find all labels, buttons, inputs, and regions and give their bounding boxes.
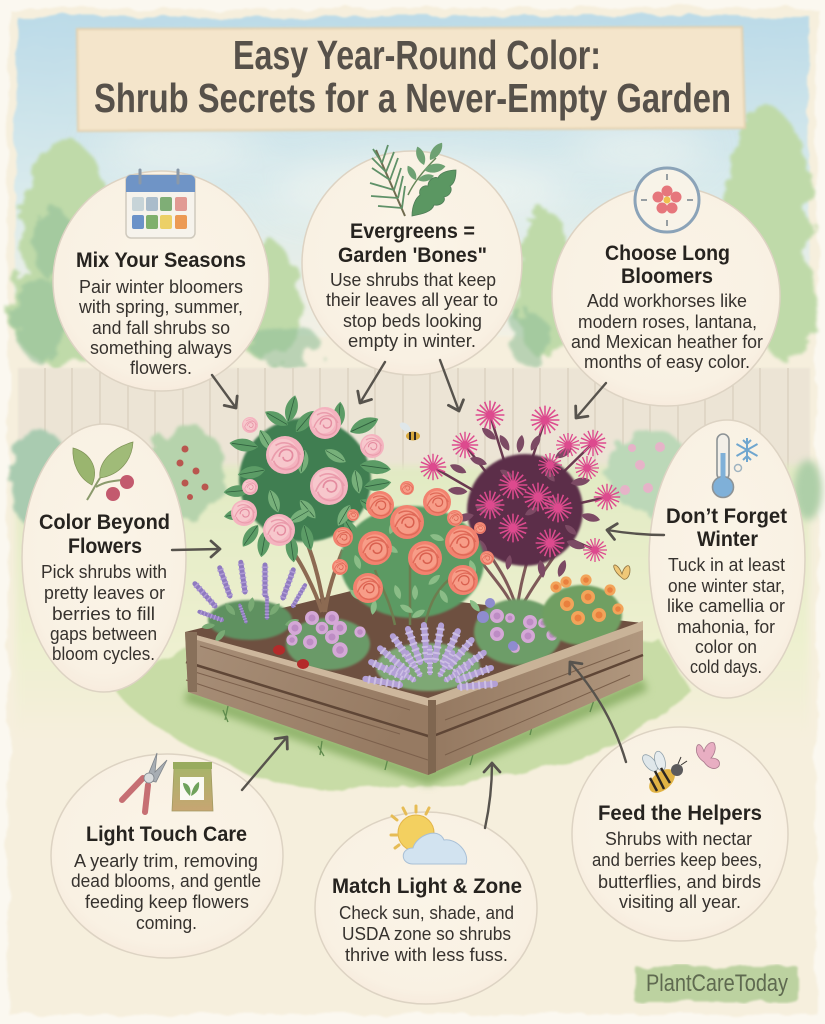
body text: Shrubs with nectar (605, 829, 752, 849)
heading: Color Beyond (39, 511, 170, 534)
body text: thrive with less fuss. (345, 945, 508, 965)
body text: visiting all year. (619, 892, 741, 912)
body text: like camellia or (667, 596, 785, 616)
arrow: match light and zone (484, 763, 500, 828)
body text: cold days. (690, 657, 762, 677)
purple shrub (420, 401, 620, 610)
wooden bed left face (185, 632, 428, 775)
sky highlights (100, 132, 710, 220)
body text (667, 555, 785, 677)
body text: Pick shrubs with (41, 562, 167, 582)
arrow: color beyond flowers (172, 541, 220, 557)
orange lantana (542, 574, 624, 645)
heading: Winter (697, 528, 758, 551)
fence (18, 368, 810, 478)
lavender left (195, 562, 305, 643)
body text: A yearly trim, removing (74, 851, 258, 871)
heading: Garden 'Bones" (338, 244, 487, 267)
body text: dead blooms, and gentle (71, 871, 261, 891)
panel: light touch care: Light Touch Care (86, 823, 247, 846)
body text: empty in winter. (348, 331, 476, 351)
soil and back rim (185, 590, 643, 702)
body text (339, 903, 514, 965)
sky wash (16, 16, 809, 336)
body text (78, 277, 243, 378)
title banner: Easy Year-Round Color: (233, 32, 601, 78)
panel: mix your seasons (53, 170, 269, 391)
body text: with spring, summer, (78, 297, 243, 317)
illustration: raised garden bed (185, 394, 643, 775)
body text: and berries keep bees, (592, 850, 762, 870)
arrow: evergreens right (440, 360, 467, 414)
icon: thermometer and snowflake (712, 434, 758, 498)
arrow: don't forget winter (606, 522, 664, 539)
heading: Don’t Forget (666, 505, 787, 528)
camellia shrub (223, 394, 392, 612)
mauve flower mound (286, 611, 370, 670)
body text: one winter star, (668, 576, 785, 596)
panel: feed the helpers (572, 727, 788, 941)
body text: stop beds looking (343, 311, 482, 331)
panel: color beyond flowers (22, 424, 186, 692)
heading: Evergreens = (350, 220, 475, 243)
body text: and fall shrubs so (92, 318, 230, 338)
heading (39, 511, 170, 558)
body text: Check sun, shade, and (339, 903, 514, 923)
body text: something always (90, 338, 232, 358)
panel: match light and zone: Match Light & Zone (332, 875, 522, 898)
body text: and Mexican heather for (571, 332, 763, 352)
panel: light touch care (51, 753, 283, 958)
panel: choose long bloomers (552, 168, 780, 406)
panel: feed the helpers: Feed the Helpers (598, 802, 762, 825)
heading (605, 242, 730, 288)
logo badge: PlantCareToday (646, 970, 788, 997)
bee near shrubs (398, 421, 420, 440)
lawn (16, 466, 809, 736)
logo badge (634, 966, 798, 1002)
body text: pretty leaves or (44, 583, 165, 603)
body text: their leaves all year to (326, 290, 498, 310)
icon: flower clock (635, 168, 699, 232)
body text (592, 829, 762, 912)
heading: Bloomers (621, 265, 713, 288)
background shrubs (8, 425, 822, 530)
arrow: choose long bloomers (570, 383, 606, 423)
icon: calendar (126, 170, 195, 238)
icon: sun and cloud (391, 806, 467, 864)
body text: coming. (136, 913, 197, 933)
body text: mahonia, for (677, 617, 775, 637)
body text: Add workhorses like (587, 291, 747, 311)
background trees (10, 110, 815, 366)
body text: modern roses, lantana, (578, 312, 757, 332)
body text: flowers. (130, 358, 192, 378)
title banner (77, 27, 745, 131)
body text: USDA zone so shrubs (342, 924, 511, 944)
ladybugs (273, 645, 309, 669)
arrow: evergreens left (353, 362, 385, 407)
panel: match light and zone (315, 806, 537, 1004)
body text: color on (695, 637, 757, 657)
icon: pruners and fertilizer bag (122, 753, 213, 812)
body text: feeding keep flowers (85, 892, 249, 912)
body text (571, 291, 763, 372)
flower cluster right (474, 598, 562, 665)
body text: berries to fill (52, 604, 155, 624)
panel: mix your seasons: Mix Your Seasons (76, 249, 246, 272)
body text: gaps between (50, 624, 157, 644)
coral rose bush (332, 481, 494, 625)
body text (326, 270, 498, 351)
arrow: feed the helpers (564, 657, 626, 762)
icon: bee and butterfly (640, 743, 719, 798)
heading (666, 505, 787, 551)
body text: Tuck in at least (668, 555, 785, 575)
body text: months of easy color. (584, 352, 750, 372)
icon: evergreen sprig and leaves (370, 140, 456, 216)
body text: bloom cycles. (52, 644, 155, 664)
body text: butterflies, and birds (598, 872, 761, 892)
icon: leaves and berries (73, 442, 134, 501)
heading: Flowers (68, 535, 142, 558)
grass under bed (108, 640, 690, 790)
wooden bed right face (428, 621, 643, 775)
body text: Pair winter bloomers (79, 277, 243, 297)
panel: don't forget winter (649, 420, 805, 698)
heading (338, 220, 487, 267)
arrow: light touch care (242, 732, 293, 790)
body text (71, 851, 261, 933)
front lavender (365, 625, 495, 691)
body text (41, 562, 167, 664)
heading: Choose Long (605, 242, 730, 265)
arrows (172, 360, 664, 828)
panel: evergreens (302, 140, 522, 375)
arrow: mix your seasons (212, 375, 242, 413)
butterfly (614, 565, 630, 579)
body text: Use shrubs that keep (330, 270, 496, 290)
